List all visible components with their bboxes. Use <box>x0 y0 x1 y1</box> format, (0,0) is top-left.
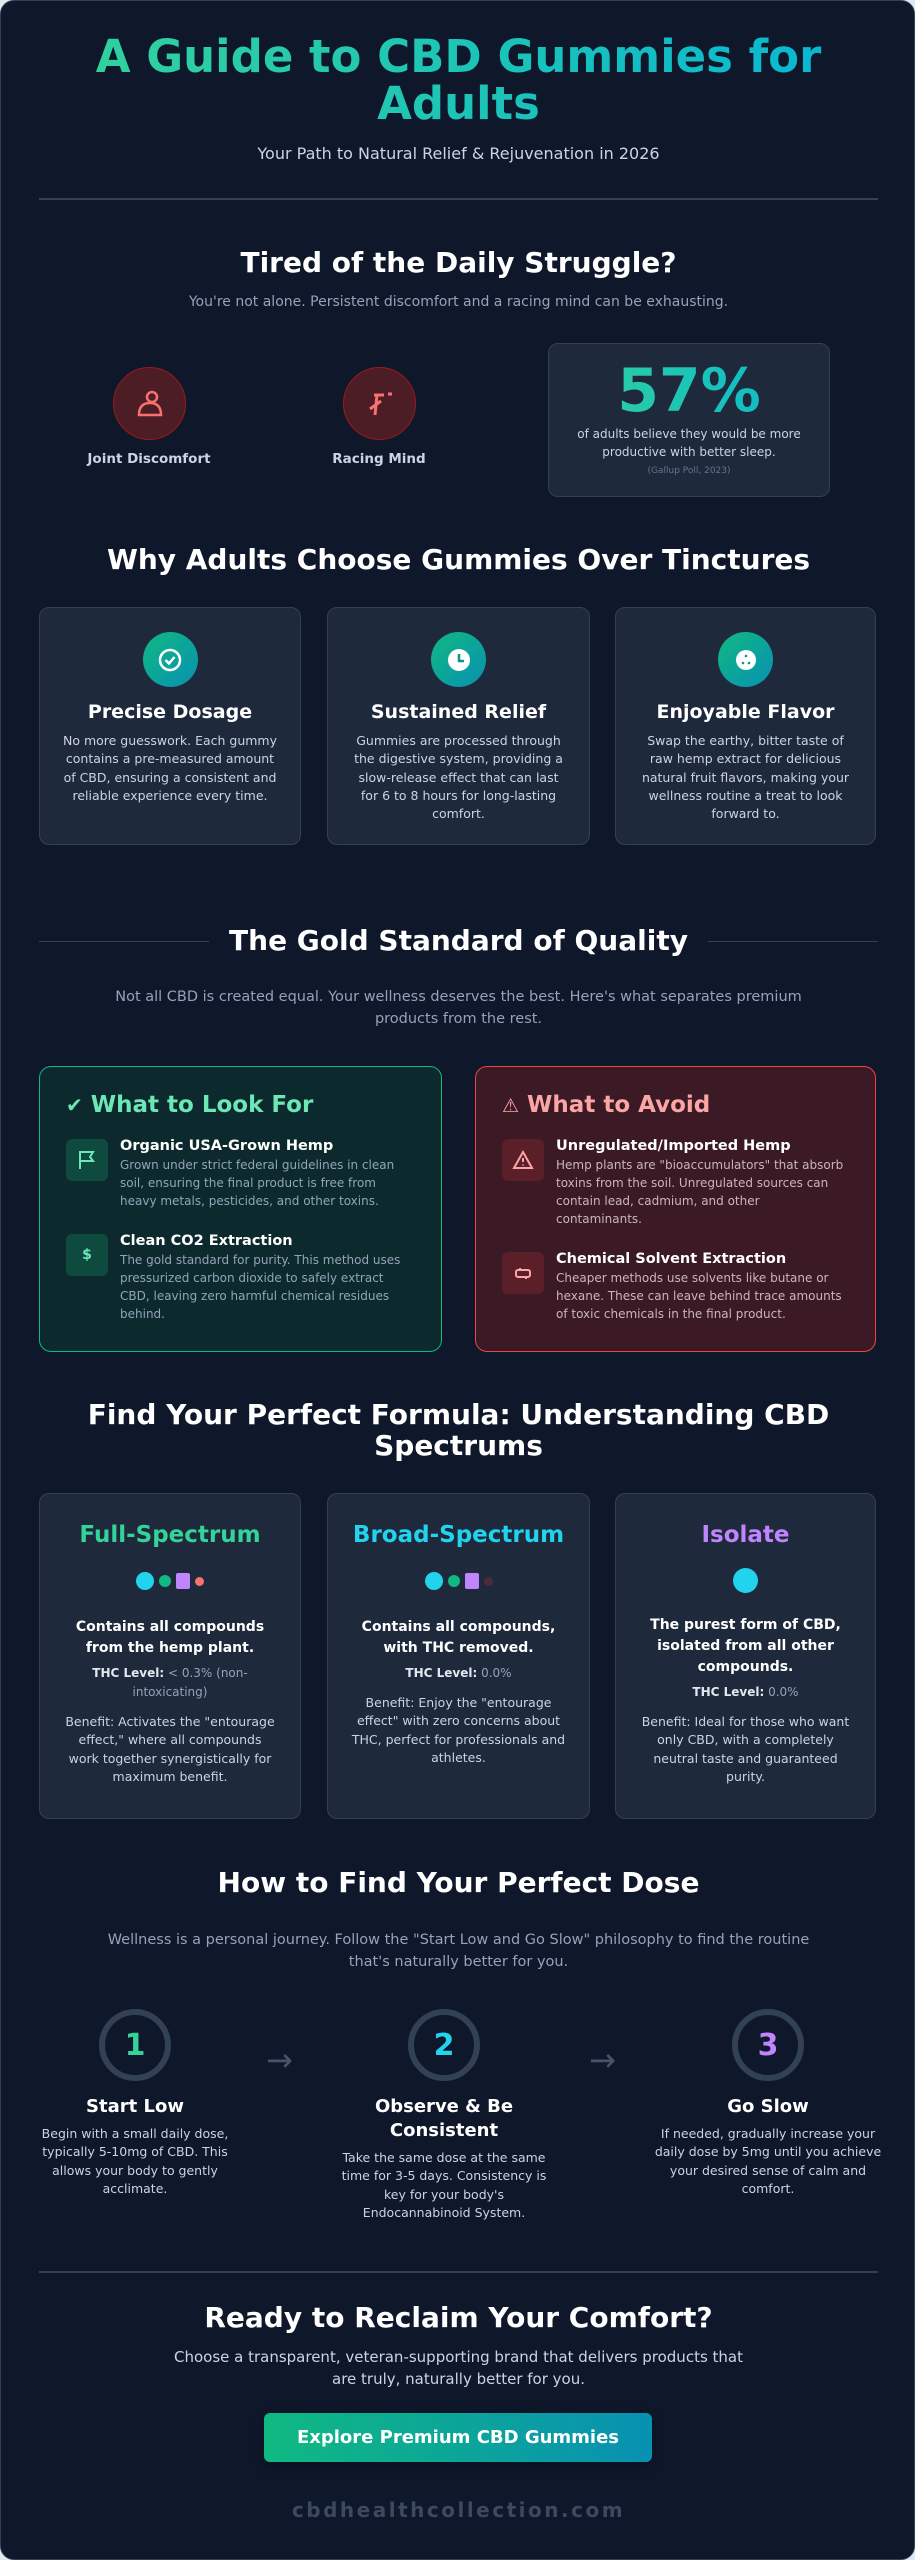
text: daily struggle subtitle: You're not alone. Persistent discomfort and a racing mind can be exhausting. <box>189 294 728 310</box>
stat card: 57%: (Gallup Poll, 2023) <box>647 466 731 476</box>
panel: what to avoid <box>475 1066 876 1352</box>
icon: clock <box>431 632 486 687</box>
stat card: 57%: 57% <box>617 356 761 426</box>
text: dose subtitle: Wellness is a personal journey. Follow the "Start Low and Go Slow" philosophy to find the routine that's naturally better for you. <box>108 1932 809 1970</box>
card: isolate: THC Level: 0.0% <box>692 1685 799 1699</box>
card: broad-spectrum: THC Level: 0.0% <box>405 1666 512 1680</box>
item: co2 extraction: Clean CO2 Extraction <box>120 1233 293 1249</box>
button: Explore Premium CBD Gummies <box>297 2427 619 2448</box>
icon: racing mind: Racing Mind <box>332 451 426 467</box>
card: full-spectrum: Benefit: Activates the "entourage effect," where all compounds <box>65 1714 275 1747</box>
heading: cta: Ready to Reclaim Your Comfort? <box>204 2301 713 2334</box>
step 1 <box>42 2009 228 2196</box>
card: full-spectrum: THC Level: < 0.3% (non-intoxicating) <box>92 1666 248 1699</box>
item: unregulated hemp: Hemp plants are "bioaccumulators" that absorb toxins from the soil. Unregulated sources can contain lead, cadmium, and other contaminants. <box>556 1158 843 1226</box>
step 2: Take the same dose at the same time for 3-5 days. Consistency is key for your body's Endocannabinoid System. <box>342 2150 546 2220</box>
step 3: Go Slow <box>727 2096 809 2117</box>
heading: dose: How to Find Your Perfect Dose <box>218 1866 699 1899</box>
subtitle: Your Path to Natural Relief & Rejuvenation in 2026 <box>257 144 660 163</box>
step 1: 1 <box>125 2028 145 2062</box>
card: broad-spectrum: Broad-Spectrum <box>353 1522 564 1548</box>
card: isolate: Benefit: Ideal for those who want only CBD, with a completely neutral taste and guaranteed purity. <box>642 1714 849 1784</box>
card: precise dosage: No more guesswork. Each gummy contains a pre-measured amount of CBD, ensuring a consistent and reliable experience every time. <box>63 733 277 803</box>
item: organic hemp: Grown under strict federal guidelines in clean soil, ensuring the final product is free from heavy metals, pesticides, and other toxins. <box>120 1158 394 1208</box>
item: chemical solvent <box>502 1251 842 1321</box>
item: unregulated hemp: Unregulated/Imported Hemp <box>556 1138 791 1154</box>
heading: avoid: ⚠︎ What to Avoid <box>502 1092 710 1118</box>
card: precise dosage <box>39 607 301 845</box>
step 2: Observe & Be Consistent <box>375 2096 513 2141</box>
arrow 1: → <box>266 2041 293 2079</box>
card: enjoyable flavor: Enjoyable Flavor <box>656 701 834 723</box>
item: organic hemp: Organic USA-Grown Hemp <box>120 1138 333 1154</box>
item: chemical solvent: Chemical Solvent Extraction <box>556 1251 786 1267</box>
heading: look for: ✔︎ What to Look For <box>66 1092 313 1118</box>
icon: compound dots without thc <box>425 1572 493 1590</box>
panel: what to look for <box>39 1066 442 1352</box>
card: full-spectrum <box>39 1493 301 1819</box>
card: isolate <box>615 1493 876 1819</box>
card: broad-spectrum <box>327 1493 590 1819</box>
footer: cbdhealthcollection.com <box>292 2498 625 2522</box>
card: broad-spectrum: Contains all compounds, with THC removed. <box>362 1619 555 1656</box>
card: enjoyable flavor: Swap the earthy, bitter taste of raw hemp extract for delicious natural fruit flavors, making your wellness routine a treat to look forward to. <box>642 733 849 821</box>
card: enjoyable flavor <box>615 607 876 845</box>
card: sustained relief: Sustained Relief <box>371 701 546 723</box>
icon: racing mind <box>332 367 426 467</box>
title: A Guide to CBD Gummies for Adults <box>96 30 821 130</box>
step 2: 2 <box>434 2028 454 2062</box>
item: co2 extraction: $ <box>82 1247 92 1263</box>
item: organic hemp <box>66 1138 394 1208</box>
card: isolate: Isolate <box>701 1522 790 1548</box>
icon: compound dots <box>136 1572 204 1590</box>
card: full-spectrum: Full-Spectrum <box>79 1522 261 1548</box>
card: broad-spectrum: Benefit: Enjoy the "entourage effect" with zero concerns about THC, perfect for professionals and athletes. <box>352 1695 565 1765</box>
heading: daily struggle: Tired of the Daily Struggle? <box>240 246 677 279</box>
step 3: 3 <box>758 2028 778 2062</box>
step 2 <box>342 2009 546 2220</box>
card: precise dosage: Precise Dosage <box>88 701 252 723</box>
heading: spectrums: Find Your Perfect Formula: Understanding CBD Spectrums <box>88 1398 829 1462</box>
heading: why gummies: Why Adults Choose Gummies Over Tinctures <box>107 543 810 576</box>
card: full-spectrum: work together synergistically for maximum benefit. <box>69 1751 271 1784</box>
card: sustained relief <box>327 607 590 845</box>
icon: single dot <box>733 1568 758 1593</box>
icon: joint discomfort <box>86 367 211 467</box>
card: full-spectrum: Contains all compounds from the hemp plant. <box>76 1619 264 1656</box>
item: co2 extraction <box>66 1233 400 1321</box>
step 1: Begin with a small daily dose, typically 5-10mg of CBD. This allows your body to gently acclimate. <box>42 2126 228 2196</box>
step 3: If needed, gradually increase your daily dose by 5mg until you achieve your desired sense of calm and comfort. <box>655 2126 881 2196</box>
arrow 2: → <box>589 2041 616 2079</box>
stat card: 57% <box>548 343 830 497</box>
icon: candy <box>718 632 773 687</box>
heading: gold standard: The Gold Standard of Quality <box>229 924 688 957</box>
step 1: Start Low <box>86 2096 184 2117</box>
stat card: 57%: productive with better sleep. <box>602 445 776 459</box>
icon: check <box>142 632 198 687</box>
text: cta subtitle: Choose a transparent, veteran-supporting brand that delivers products that are truly, naturally better for you. <box>174 2348 743 2388</box>
icon: joint discomfort: Joint Discomfort <box>87 451 211 467</box>
card: sustained relief: Gummies are processed through the digestive system, providing a slow-release effect that can last for 6 to 8 hours for long-lasting comfort. <box>354 733 563 821</box>
text: gold standard subtitle: Not all CBD is created equal. Your wellness deserves the best. Here's what separates premium products from the rest. <box>115 989 802 1027</box>
item: co2 extraction: The gold standard for purity. This method uses pressurized carbon dioxide to safely extract CBD, leaving zero harmful chemical residues behind. <box>120 1253 400 1321</box>
item: chemical solvent: Cheaper methods use solvents like butane or hexane. These can leave behind trace amounts of toxic chemicals in the final product. <box>556 1271 842 1321</box>
card: isolate: The purest form of CBD, isolated from all other compounds. <box>650 1617 841 1675</box>
item: unregulated hemp <box>502 1138 843 1226</box>
stat card: 57%: of adults believe they would be more <box>577 427 801 441</box>
step 3 <box>655 2009 881 2196</box>
button <box>264 2413 652 2462</box>
